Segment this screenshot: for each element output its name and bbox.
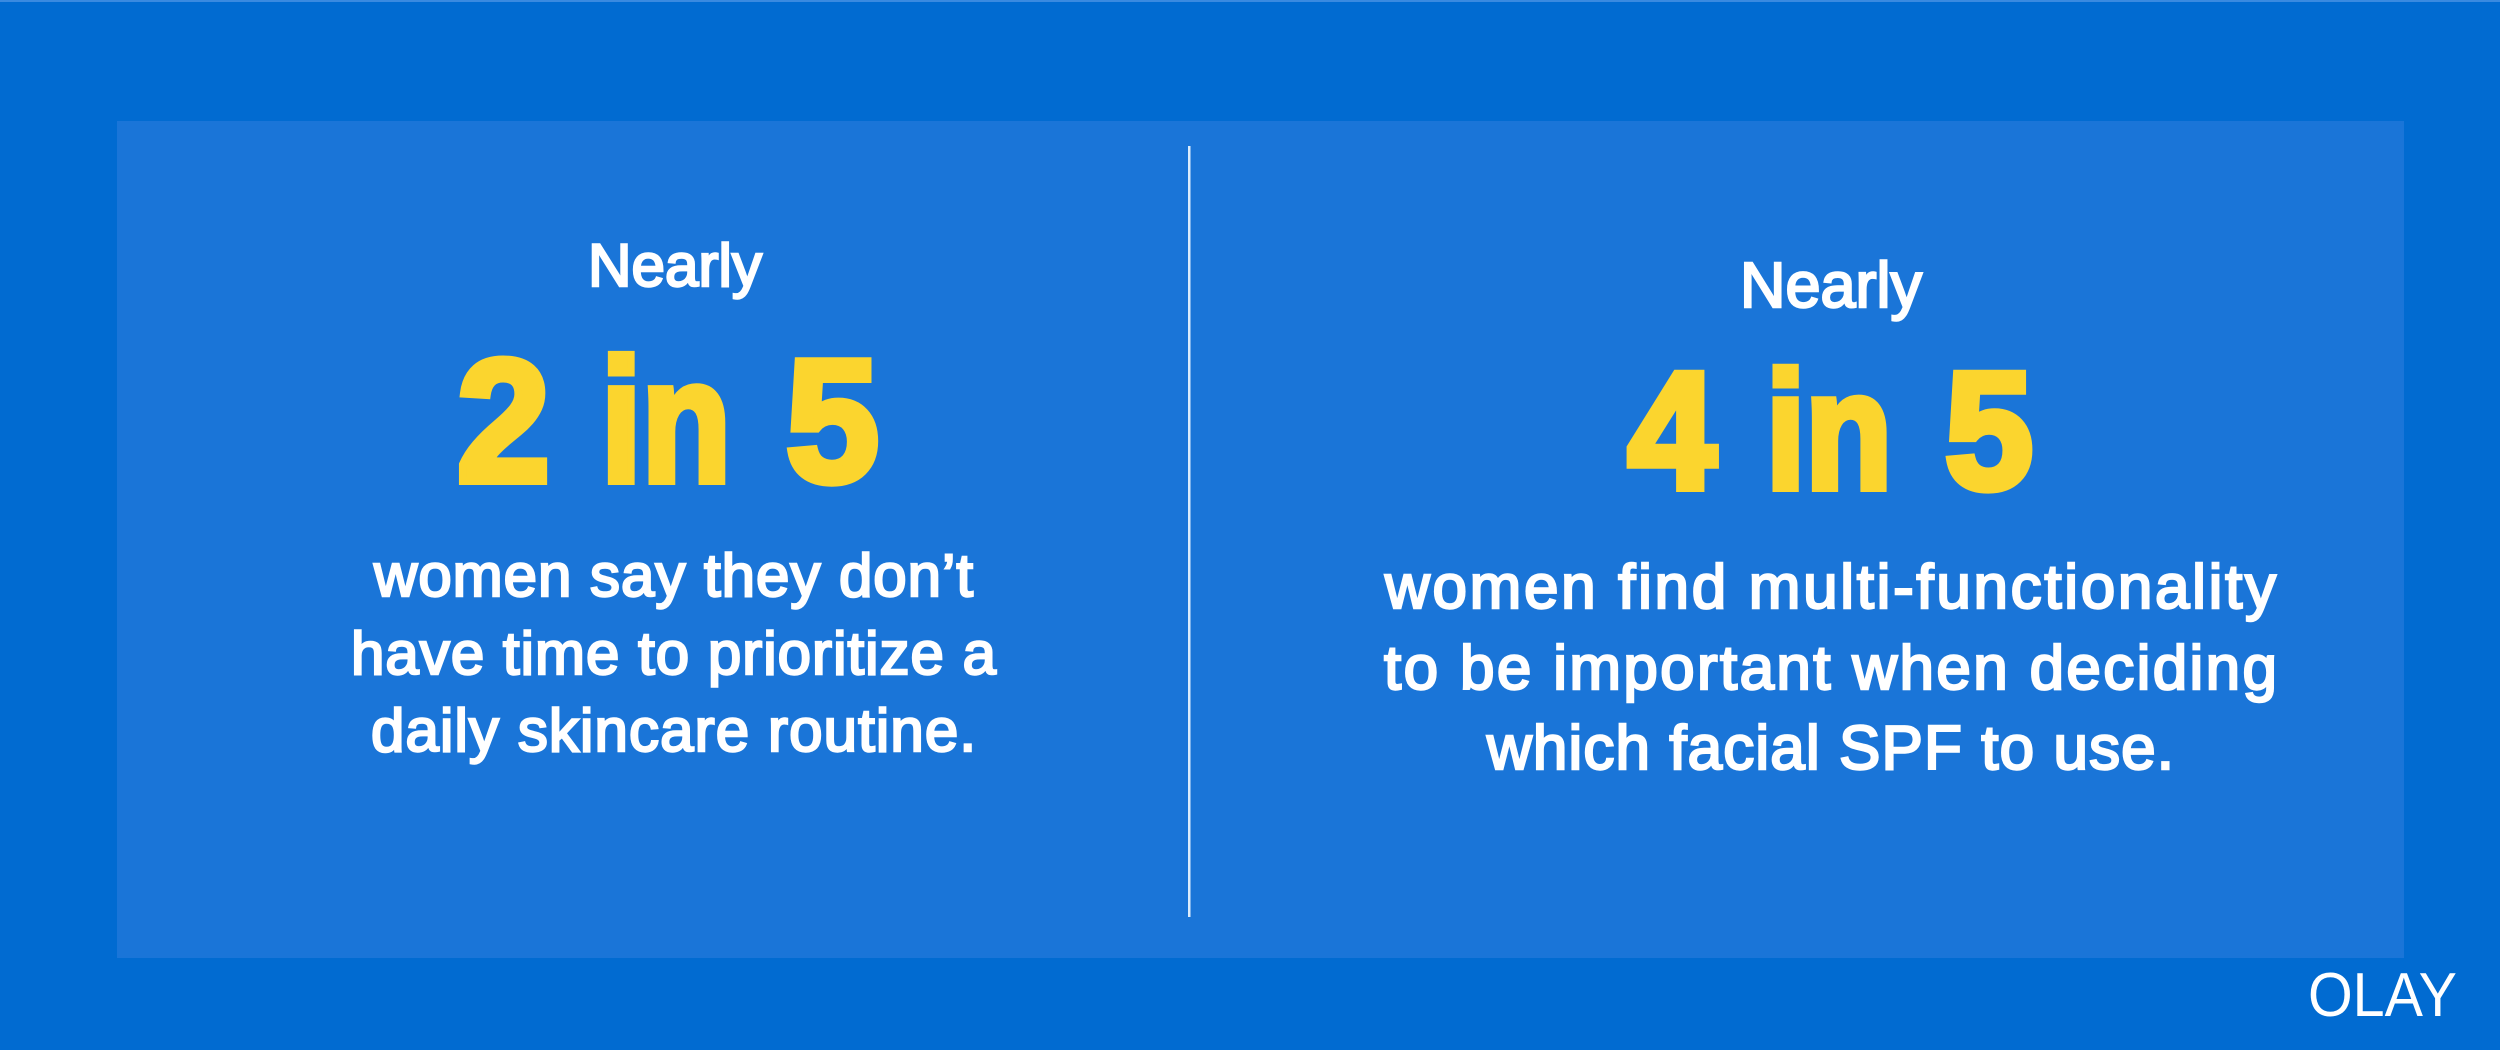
description: women say they don’t [373,542,973,609]
description: which facial SPF to use. [1486,714,2174,783]
big number: 4 in 5: 4 [1628,339,1716,524]
big number: 2 in 5: 2 [457,323,550,518]
description [351,542,997,764]
big number: 4 in 5: 5 [1945,339,2033,524]
panel divider [1188,146,1190,917]
stat block: 4 in 5 [1384,249,2277,783]
lead-in: Nearly: Nearly [588,232,762,299]
stat block: 2 in 5 [351,232,997,764]
big number: 2 in 5: in [601,323,731,518]
description: have time to prioritize a [351,620,997,687]
lead-in: Nearly: Nearly [1740,249,1922,321]
top edge highlight [0,0,2500,2]
description [1384,553,2277,783]
big number: 4 in 5: in [1766,339,1892,524]
big number: 4 in 5 [1628,339,2033,524]
description: to be important when deciding [1384,634,2277,703]
big number: 2 in 5 [457,323,879,518]
panel: statistics [117,121,2404,958]
description: women find multi-functionality [1384,553,2276,622]
description: daily skincare routine. [371,697,976,764]
logo: OLAY: OLAY [2308,961,2457,1030]
big number: 2 in 5: 5 [786,323,879,518]
